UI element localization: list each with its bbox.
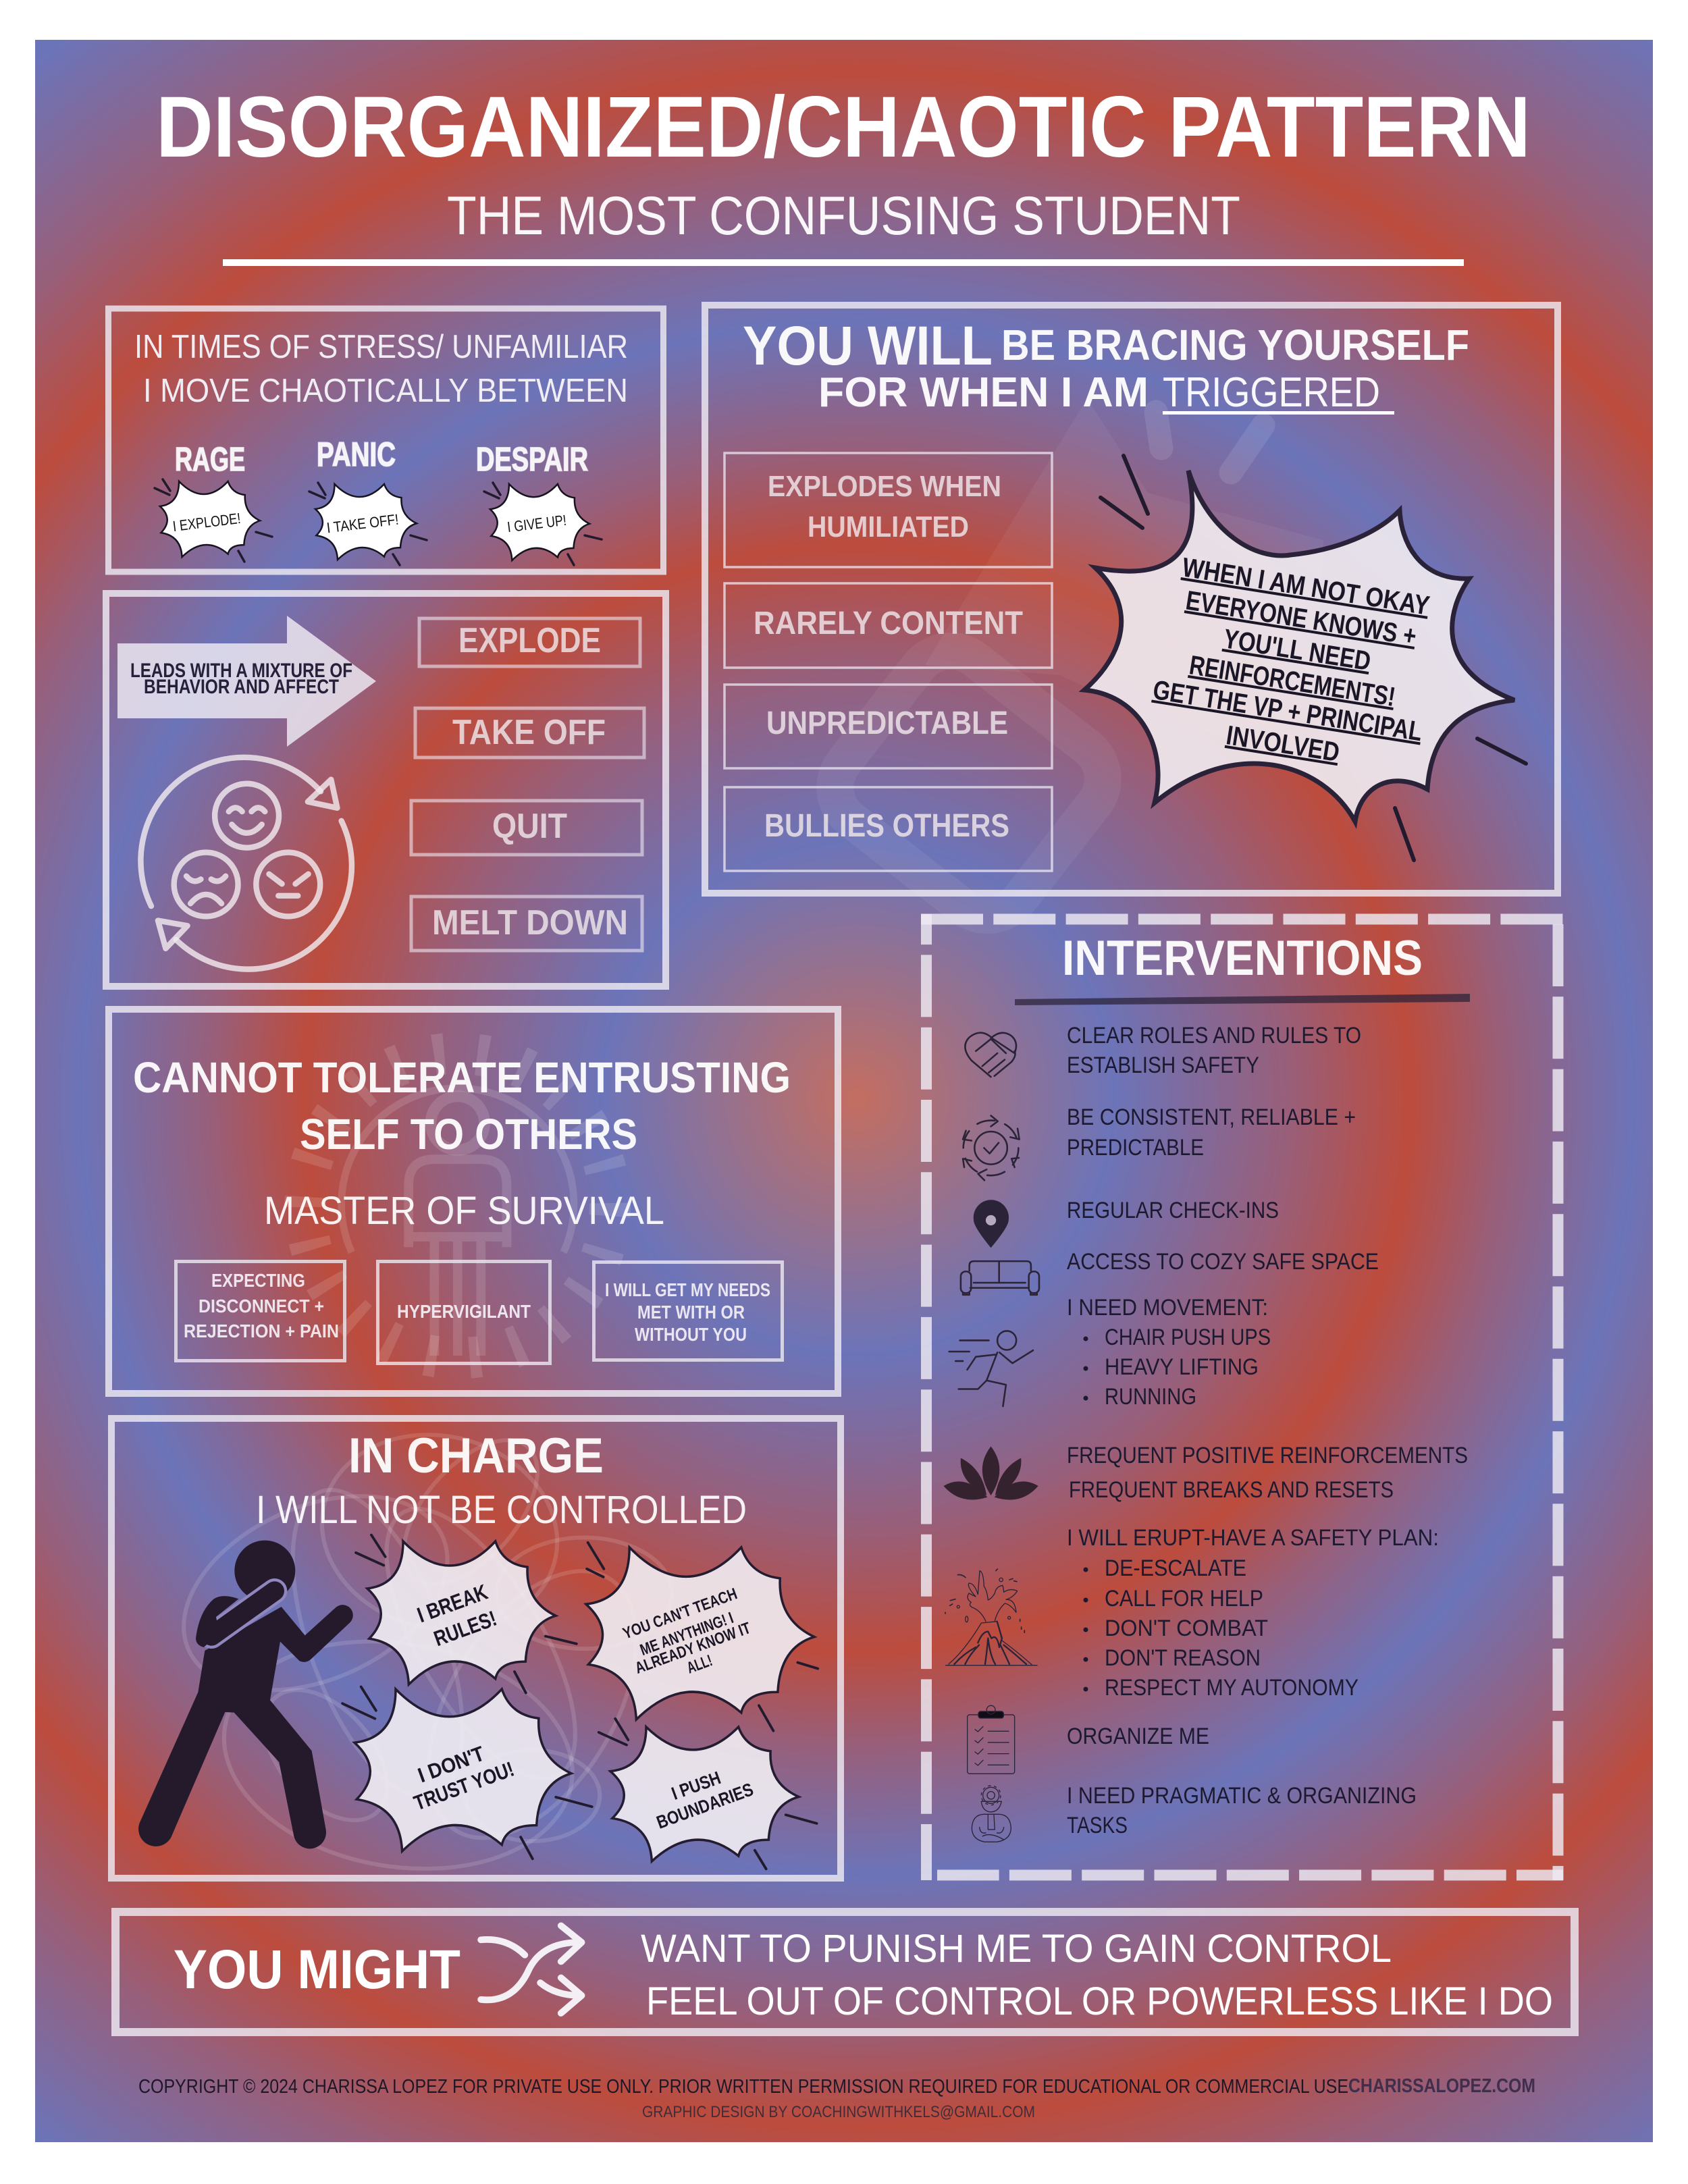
watermark: tangled lines [152,1410,679,1894]
footer credit: GRAPHIC DESIGN BY COACHINGWITHKELS@GMAIL.COM [642,2103,1035,2121]
footer copyright: CHARISSALOPEZ.COM [1348,2075,1535,2097]
burst: you can't teach me: ALREADY KNOW IT [633,1619,754,1678]
heading: CANNOT TOLERATE ENTRUSTING [133,1053,791,1102]
box: expecting disconnect [176,1261,344,1361]
box: explode [419,618,640,666]
intervention: movement: CHAIR PUSH UPS [1105,1325,1271,1350]
burst: I push boundaries: BOUNDARIES [654,1779,756,1833]
intervention: safety plan [945,1525,1439,1701]
stress heading: IN TIMES OF STRESS/ UNFAMILIAR [134,329,628,365]
heading: YOU WILL [743,315,993,377]
footer copyright: COPYRIGHT © 2024 CHARISSA LOPEZ FOR PRIVATE USE ONLY. PRIOR WRITTEN PERMISSION REQUIRED FOR EDUCATIONAL OR COMMERCIAL USE [138,2076,1348,2098]
stress heading [134,329,628,409]
intervention: cozy space: ACCESS TO COZY SAFE SPACE [1067,1249,1379,1275]
burst: I break rules [367,1541,556,1684]
box: I will get my needs met: WITHOUT YOU [635,1324,747,1345]
box: bullies others [724,787,1052,871]
intervention: clear roles: ESTABLISH SAFETY [1067,1053,1259,1078]
box: I will get my needs met: I WILL GET MY NEEDS [605,1279,770,1300]
panel: cannot tolerate [109,1009,838,1393]
panel: you might [115,1912,1575,2032]
panel: times of stress [108,309,663,572]
burst: I explode [155,479,272,562]
burst: I explode: I EXPLODE! [172,510,242,535]
box: rarely content [724,583,1052,668]
heading: TRIGGERED [1163,369,1380,416]
box: expecting disconnect: REJECTION + PAIN [184,1321,339,1341]
intervention: reinforcements and breaks: FREQUENT BREAKS AND RESETS [1069,1477,1394,1503]
burst: when I am not okay: YOU'LL NEED [1221,624,1373,676]
intervention: consistent: PREDICTABLE [1067,1135,1204,1161]
burst: I don't trust you [354,1689,571,1851]
box: take off: TAKE OFF [452,713,606,752]
intervention: pragmatic tasks: I NEED PRAGMATIC & ORGANIZING [1067,1783,1417,1809]
title rule [223,259,1464,266]
intervention: cozy space [961,1249,1379,1295]
box: I will get my needs met: MET WITH OR [637,1302,745,1323]
label: panic: PANIC [317,435,396,473]
watermark [819,398,1323,932]
heading: INTERVENTIONS [1062,931,1423,986]
label: despair: DESPAIR [476,442,588,478]
box: melt down [411,897,642,951]
intervention: clear roles [965,1023,1361,1078]
burst: I break rules: I BREAK [414,1580,491,1627]
icon: shuffle arrows [481,1925,581,2013]
burst: you can't teach me [586,1547,814,1720]
box: I will get my needs met [594,1262,782,1360]
statement: want to punish: WANT TO PUNISH ME TO GAIN CONTROL [641,1927,1392,1971]
intervention: check-ins [974,1198,1279,1248]
burst: when I am not okay: EVERYONE KNOWS + [1184,585,1419,651]
icon: cycle of emotions [140,757,352,969]
arrow with label [117,616,376,747]
intervention: reinforcements and breaks: FREQUENT POSITIVE REINFORCEMENTS [1067,1443,1468,1468]
arrow with label: LEADS WITH A MIXTURE OF [130,660,352,682]
intervention: organize me [968,1705,1209,1774]
panel: leads with a mixture [106,593,666,986]
burst: when I am not okay: WHEN I AM NOT OKAY [1180,552,1431,621]
intervention: safety plan: CALL FOR HELP [1105,1586,1263,1612]
burst: when I am not okay: INVOLVED [1224,720,1342,768]
burst: when I am not okay: GET THE VP + PRINCIPAL [1151,675,1424,747]
panel: interventions [921,914,1563,1880]
intervention: movement [949,1295,1271,1410]
intervention: movement: I NEED MOVEMENT: [1067,1295,1268,1321]
heading: YOU MIGHT [174,1939,460,2000]
intervention: pragmatic tasks: TASKS [1067,1813,1128,1838]
intervention: safety plan: DE-ESCALATE [1105,1555,1246,1581]
icon: fighter figure [138,1541,353,1848]
box: take off [415,708,644,757]
burst: I take off: I TAKE OFF! [325,511,400,536]
box: unpredictable: UNPREDICTABLE [766,705,1008,741]
intervention: consistent [963,1104,1356,1180]
intervention: safety plan: RESPECT MY AUTONOMY [1105,1675,1359,1701]
intervention: movement: RUNNING [1105,1384,1196,1410]
box: unpredictable [724,685,1052,768]
box: hypervigilant [378,1261,550,1364]
intervention: clear roles: CLEAR ROLES AND RULES TO [1067,1023,1361,1048]
burst: I don't trust you: TRUST YOU! [411,1757,517,1815]
intervention: pragmatic tasks [972,1783,1417,1842]
burst: I push boundaries: I PUSH [669,1767,723,1804]
box: melt down: MELT DOWN [432,903,628,942]
burst: I don't trust you: I DON'T [415,1742,487,1787]
box: expecting disconnect: DISCONNECT + [199,1296,324,1316]
subheading: MASTER OF SURVIVAL [264,1189,664,1233]
intervention: check-ins: REGULAR CHECK-INS [1067,1198,1279,1223]
burst: when I am not okay [1084,456,1526,860]
intervention: organize me: ORGANIZE ME [1067,1724,1209,1749]
watermark: person with rays [305,1053,610,1358]
burst: when I am not okay: REINFORCEMENTS! [1187,650,1398,712]
heading rule [1015,994,1470,1005]
box: explode: EXPLODE [458,621,601,660]
subtitle: THE MOST CONFUSING STUDENT [447,186,1240,246]
heading: FOR WHEN I AM [818,369,1149,416]
box: expecting disconnect: EXPECTING [211,1270,305,1291]
box: quit [411,801,642,855]
title: DISORGANIZED/CHAOTIC PATTERN [156,79,1531,176]
heading [133,1053,791,1158]
burst: I take off [309,483,427,565]
heading: SELF TO OTHERS [300,1110,637,1158]
heading [743,315,1469,416]
burst: you can't teach me: ALL! [685,1651,715,1678]
heading: IN CHARGE [348,1429,604,1483]
intervention: reinforcements and breaks [943,1443,1468,1503]
intervention: consistent: BE CONSISTENT, RELIABLE + [1067,1104,1356,1130]
burst emphasis ticks [342,1535,818,1869]
intervention: safety plan: DON'T REASON [1105,1645,1261,1671]
panel: you will be bracing [705,305,1558,932]
burst: I break rules: RULES! [431,1606,500,1651]
heading: BE BRACING YOURSELF [1001,321,1469,369]
intervention: safety plan: I WILL ERUPT-HAVE A SAFETY PLAN: [1067,1525,1439,1551]
box: hypervigilant: HYPERVIGILANT [397,1301,531,1322]
burst: I give up [484,483,602,565]
burst: you can't teach me: YOU CAN'T TEACH [621,1584,739,1643]
panel: in charge [111,1410,841,1894]
burst: I push boundaries [610,1727,799,1861]
intervention: movement: HEAVY LIFTING [1105,1354,1259,1380]
box: explodes when humiliated [724,453,1052,567]
box: explodes when humiliated: HUMILIATED [808,510,969,543]
box: rarely content: RARELY CONTENT [754,606,1023,641]
stress heading: I MOVE CHAOTICALLY BETWEEN [143,373,628,409]
box: quit: QUIT [492,807,567,846]
arrow with label: BEHAVIOR AND AFFECT [144,676,339,698]
intervention: safety plan: DON'T COMBAT [1105,1616,1268,1641]
label: rage: RAGE [175,442,245,478]
burst: you can't teach me: ME ANYTHING! I [637,1609,736,1659]
statement: feel out of control: FEEL OUT OF CONTROL OR POWERLESS LIKE I DO [646,1979,1553,2023]
box: explodes when humiliated: EXPLODES WHEN [768,470,1001,503]
subheading: I WILL NOT BE CONTROLLED [256,1488,747,1532]
burst: I give up: I GIVE UP! [506,512,567,535]
box: bullies others: BULLIES OTHERS [764,808,1009,844]
